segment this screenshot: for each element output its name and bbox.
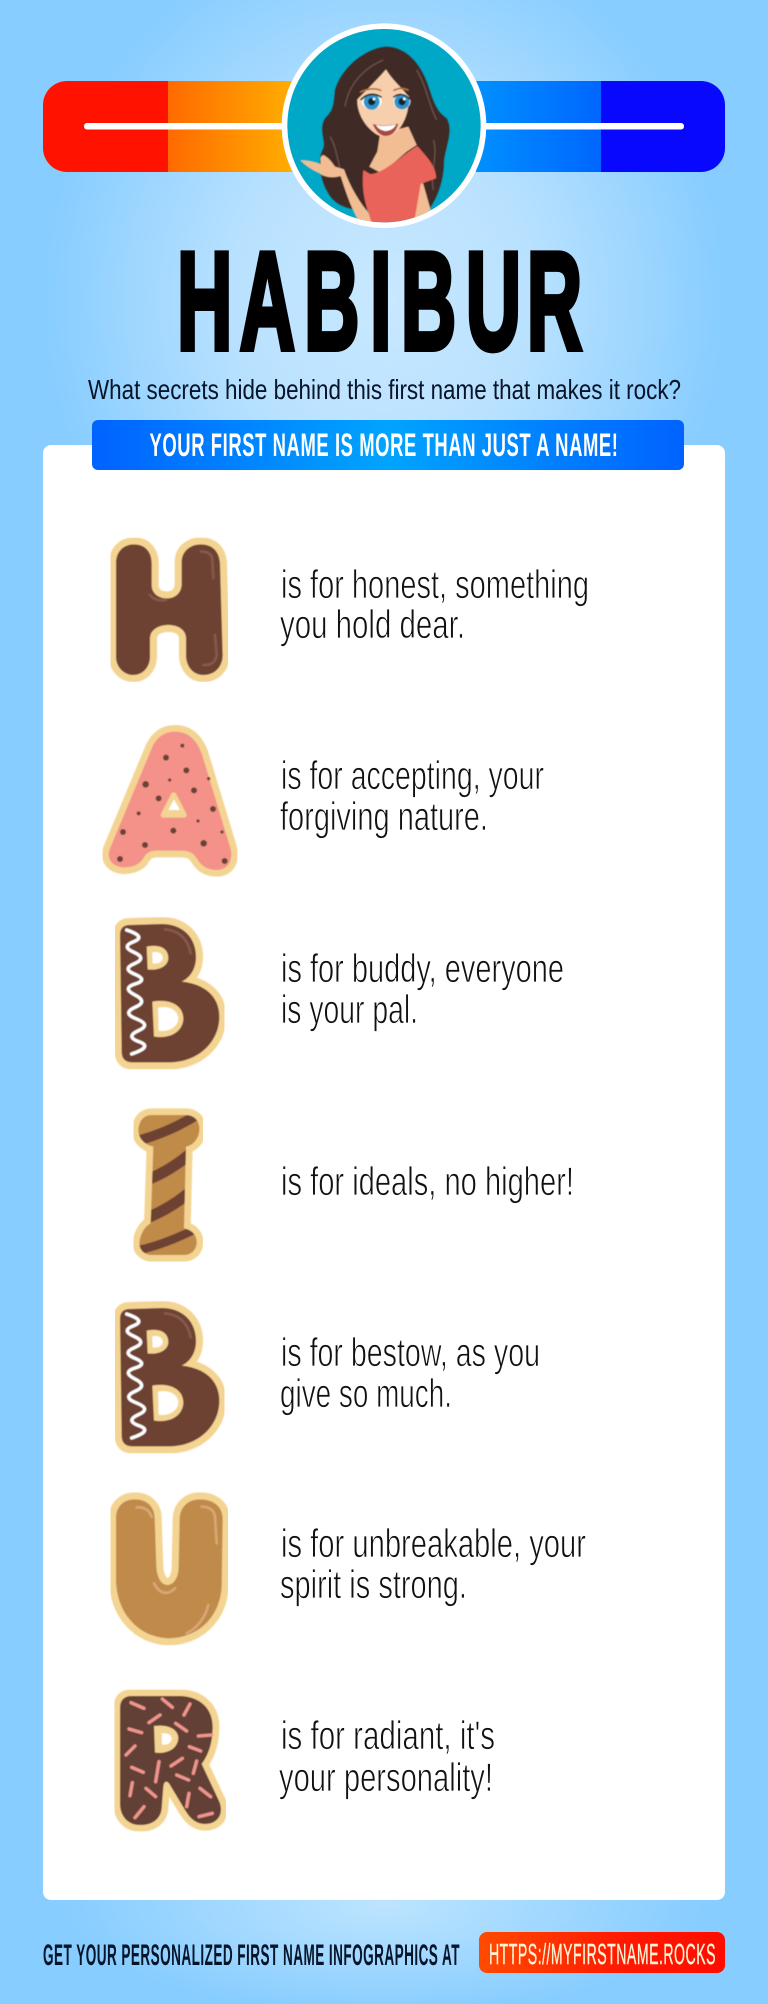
text R: your personality! bbox=[279, 1756, 493, 1800]
text I: is for ideals, no higher! bbox=[281, 1160, 574, 1204]
cookie letter B second bbox=[120, 1308, 219, 1446]
cookie letter I bbox=[137, 1115, 199, 1255]
hair bbox=[320, 47, 450, 210]
title: HABIBUR bbox=[177, 223, 582, 379]
portrait: woman in circle bbox=[282, 23, 486, 230]
row I bbox=[137, 1115, 574, 1255]
text B second: give so much. bbox=[280, 1372, 452, 1416]
text H: is for honest, something bbox=[281, 563, 589, 607]
shirt bbox=[363, 146, 436, 223]
cookie letter H bbox=[116, 544, 223, 675]
text A: forgiving nature. bbox=[280, 795, 488, 839]
text U: spirit is strong. bbox=[280, 1563, 467, 1607]
text R: is for radiant, it's bbox=[281, 1714, 495, 1758]
arm and hand bbox=[300, 154, 372, 222]
banner bbox=[92, 420, 684, 470]
eyes bbox=[361, 93, 410, 110]
hair strands bbox=[330, 60, 437, 190]
text H: you hold dear. bbox=[280, 603, 465, 647]
row R bbox=[120, 1696, 495, 1825]
text A: is for accepting, your bbox=[281, 754, 544, 798]
cookie letter A bbox=[109, 732, 231, 870]
row H bbox=[116, 544, 589, 675]
row B second bbox=[120, 1308, 540, 1446]
white panel bbox=[43, 445, 725, 1900]
footer url button bbox=[479, 1932, 725, 1973]
smile bbox=[373, 123, 398, 136]
row B bbox=[120, 924, 564, 1062]
face bbox=[357, 69, 409, 137]
text U: is for unbreakable, your bbox=[281, 1522, 586, 1566]
text B second: is for bestow, as you bbox=[281, 1331, 540, 1375]
cookie letter U bbox=[116, 1499, 223, 1638]
neck and chest bbox=[369, 127, 417, 173]
header colour bar bbox=[43, 81, 725, 172]
right arm bbox=[414, 182, 432, 218]
row U bbox=[116, 1499, 586, 1638]
row A bbox=[109, 732, 544, 870]
text B: is for buddy, everyone bbox=[281, 947, 564, 991]
eyebrows bbox=[361, 88, 408, 92]
cookie letter R bbox=[120, 1696, 221, 1825]
cookie letter B bbox=[120, 924, 219, 1062]
text B: is your pal. bbox=[281, 988, 418, 1032]
